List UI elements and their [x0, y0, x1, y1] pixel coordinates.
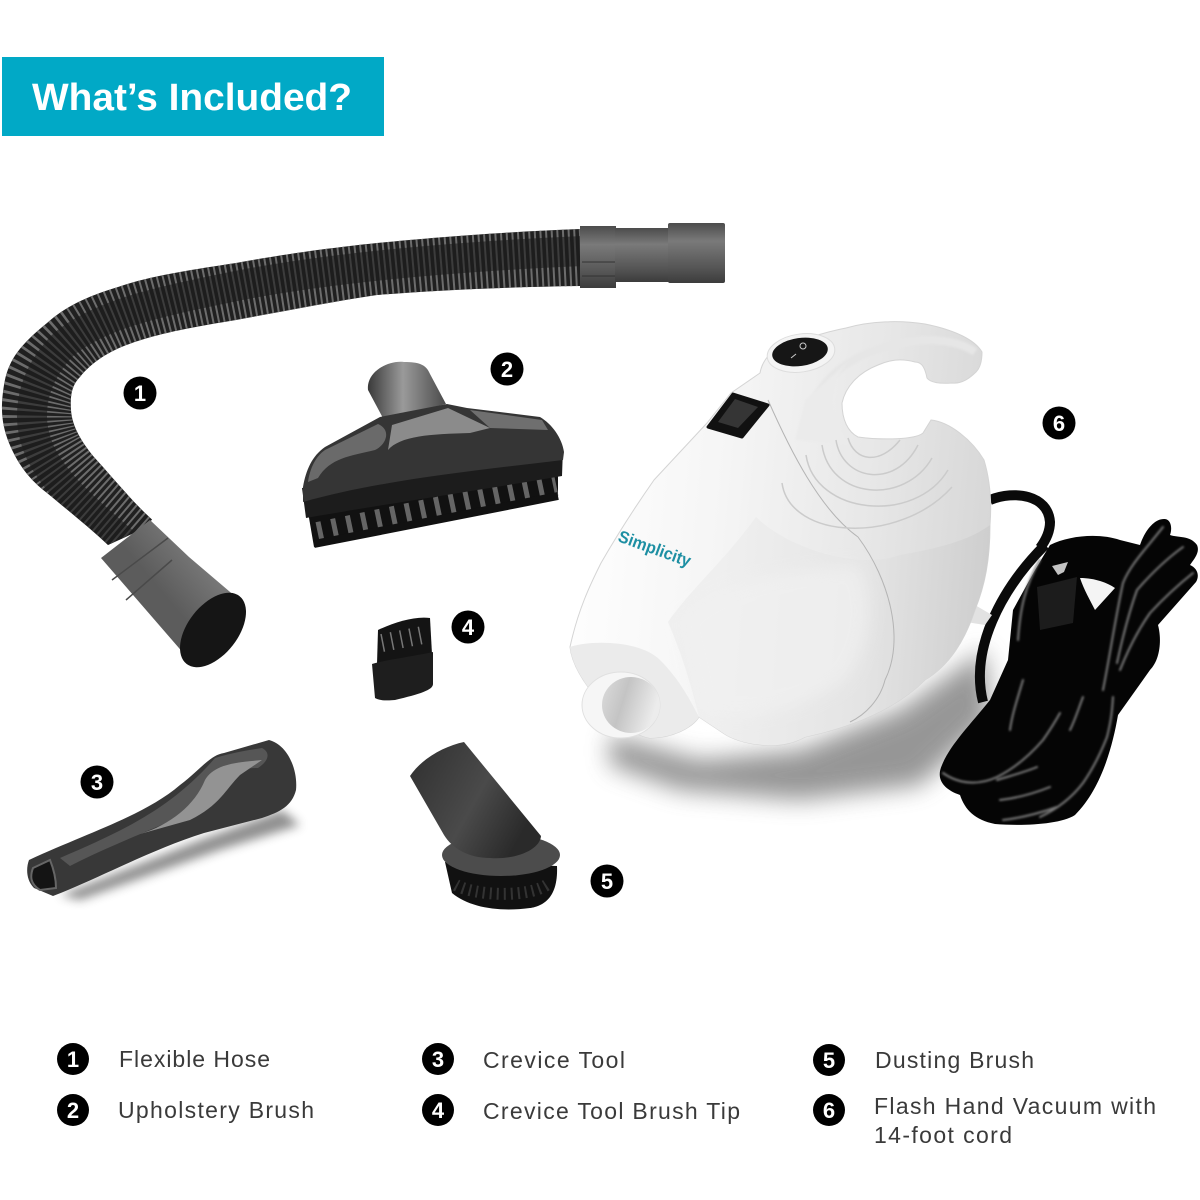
lower front highlight — [680, 565, 868, 716]
legend item 3 — [422, 1043, 625, 1075]
legend item 5: 5 — [823, 1048, 835, 1073]
plug — [1037, 577, 1077, 630]
power switch — [765, 329, 837, 377]
bristles — [308, 468, 558, 547]
hose ribs — [32, 251, 582, 546]
dusting flange — [442, 834, 560, 876]
legend item 3: 3 — [432, 1047, 444, 1072]
item 5: dusting brush — [410, 742, 560, 909]
rear tab — [966, 605, 992, 625]
vacuum body — [570, 322, 991, 745]
callout 2: 2 — [501, 357, 513, 382]
handle shading — [812, 340, 975, 405]
legend item 6: 14-foot cord — [874, 1122, 1012, 1148]
brush base — [302, 448, 563, 518]
legend item 5: Dusting Brush — [875, 1047, 1034, 1073]
swirl pattern — [782, 438, 952, 528]
callout 2 — [490, 352, 524, 386]
floor shadow of vacuum — [610, 650, 990, 800]
legend — [57, 1043, 1156, 1148]
legend item 1 — [57, 1043, 270, 1075]
hose left connector — [101, 520, 259, 679]
callout 1 — [124, 376, 156, 410]
dusting tube — [410, 742, 541, 858]
legend item 4 — [422, 1094, 740, 1126]
callout 5: 5 — [601, 869, 613, 894]
callout 3 — [80, 766, 114, 798]
callout 6 — [1042, 406, 1076, 440]
brush neck — [368, 362, 446, 420]
cord highlights — [943, 527, 1193, 820]
legend item 6: 6 — [823, 1098, 835, 1123]
legend item 1: Flexible Hose — [119, 1046, 270, 1072]
callout 4: 4 — [462, 615, 475, 640]
crevice tool shadow — [60, 810, 300, 900]
title banner — [2, 57, 384, 136]
item 3: crevice tool — [27, 740, 300, 900]
callout 5 — [590, 864, 624, 898]
callout 1: 1 — [134, 381, 146, 406]
item 6: power cord — [940, 495, 1198, 825]
item 2: upholstery brush — [302, 362, 564, 547]
legend item 2: 2 — [67, 1098, 79, 1123]
seam line — [768, 400, 894, 722]
cord bundle — [940, 519, 1198, 825]
item 6: hand vacuum — [570, 322, 992, 745]
item 1: flexible hose — [32, 223, 725, 679]
tip base — [372, 652, 433, 700]
legend item 1: 1 — [67, 1047, 79, 1072]
item 4: crevice tool brush tip — [372, 618, 433, 700]
legend item 4: 4 — [432, 1098, 445, 1123]
left cord loop — [980, 545, 1045, 702]
legend item 3: Crevice Tool — [483, 1047, 625, 1073]
dusting bristles — [445, 862, 557, 909]
hose right connector — [580, 223, 725, 288]
nozzle collar — [570, 643, 699, 738]
legend item 6: Flash Hand Vacuum with — [874, 1093, 1156, 1119]
callout 3: 3 — [91, 770, 103, 795]
brush head — [303, 404, 564, 502]
logo text: Simplicity — [616, 527, 694, 571]
legend item 4: Crevice Tool Brush Tip — [483, 1098, 740, 1124]
rear shell shading — [668, 517, 990, 745]
legend item 6 — [813, 1093, 1156, 1148]
callout 4 — [452, 610, 484, 644]
nozzle opening — [582, 672, 660, 738]
legend item 5 — [813, 1044, 1034, 1076]
legend item 2: Upholstery Brush — [118, 1097, 314, 1123]
title text: What’s Included? — [32, 77, 352, 119]
speed slider — [708, 394, 768, 437]
callout 6: 6 — [1053, 411, 1065, 436]
tip bristles — [377, 618, 432, 664]
legend item 2 — [57, 1094, 314, 1126]
